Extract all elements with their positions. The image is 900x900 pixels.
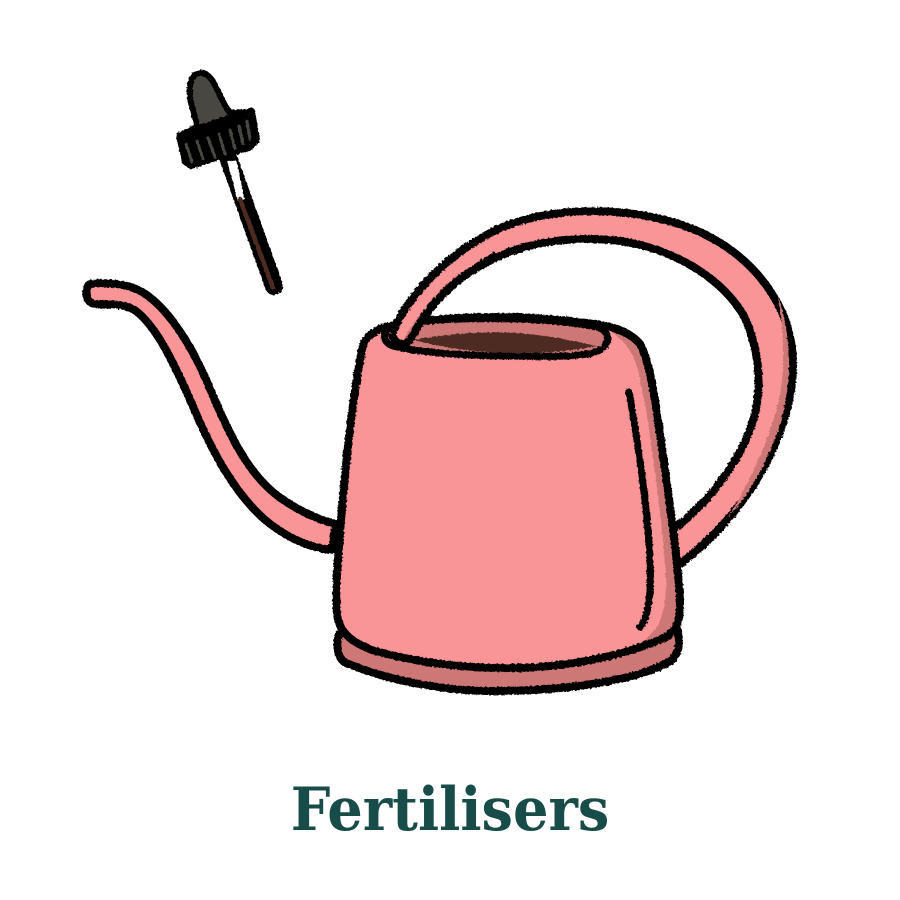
body outline xyxy=(336,317,680,668)
body shading xyxy=(610,330,676,642)
illustration: watering can and dropper xyxy=(82,68,798,696)
highlight stroke on body xyxy=(629,392,650,627)
handle end outline xyxy=(388,226,496,346)
watering can body xyxy=(336,317,690,668)
cap ribs xyxy=(186,121,250,162)
watering can base xyxy=(337,628,679,691)
can opening xyxy=(385,319,608,356)
watering can handle xyxy=(392,211,793,566)
dropper tube xyxy=(229,160,274,286)
dropper bulb xyxy=(182,73,246,134)
dropper cap xyxy=(179,111,257,166)
handle end shading xyxy=(404,272,462,340)
watering can spout xyxy=(86,283,336,550)
handle end in opening xyxy=(388,226,495,346)
title: Fertilisers xyxy=(291,775,609,845)
soil xyxy=(414,332,596,353)
handle shading xyxy=(728,296,789,518)
icon: dropper xyxy=(179,73,274,288)
